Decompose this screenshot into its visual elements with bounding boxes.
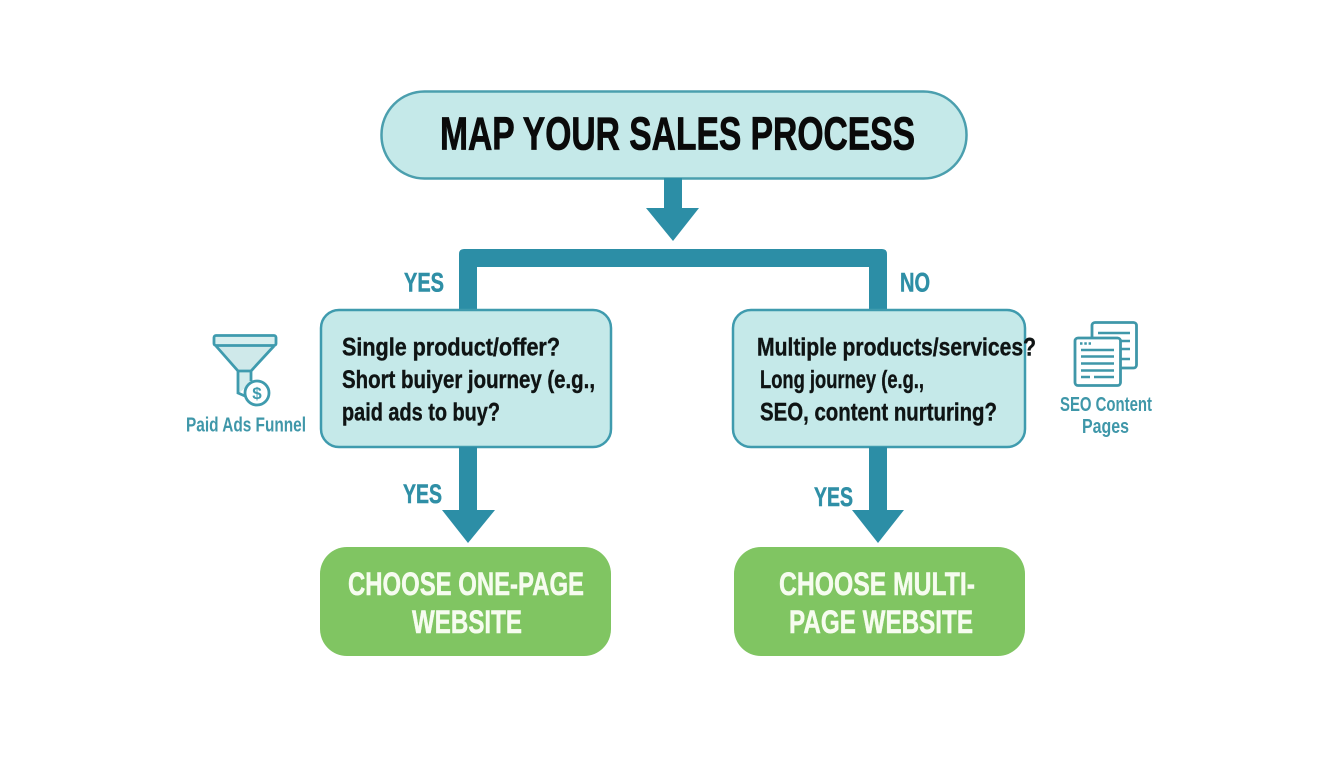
result: one-page website	[320, 547, 611, 656]
panel: multiple products question: Multiple products/services?	[757, 334, 1036, 362]
branch connector	[459, 249, 887, 311]
result: multi-page website: CHOOSE MULTI-	[779, 566, 975, 602]
arrow: title to branch	[646, 178, 699, 241]
panel: multiple products question: SEO, content nurturing?	[760, 398, 997, 426]
label: YES left: YES	[404, 268, 444, 298]
panel: multiple products question: Long journey (e.g.,	[760, 366, 924, 394]
icon label: SEO content pages: Pages	[1082, 416, 1129, 438]
result: one-page website: WEBSITE	[412, 604, 522, 640]
panel: multiple products question	[733, 310, 1036, 447]
result: multi-page website: PAGE WEBSITE	[789, 604, 973, 640]
label: YES lower left: YES	[403, 479, 442, 509]
arrow: left question to result	[442, 447, 495, 543]
title box: MAP YOUR SALES PROCESS	[440, 108, 915, 160]
panel: single product question: Single product/offer?	[342, 334, 560, 362]
icon label: SEO content pages: SEO Content	[1060, 394, 1152, 416]
panel: single product question	[321, 310, 611, 447]
title box	[382, 92, 966, 178]
label: NO: NO	[900, 268, 930, 298]
icon label: SEO content pages	[1060, 394, 1152, 438]
icon: funnel with dollar: $	[252, 384, 262, 403]
icon label: paid ads funnel: Paid Ads Funnel	[186, 414, 306, 436]
panel: single product question: Short buiyer journey (e.g.,	[342, 366, 595, 394]
panel: single product question: paid ads to buy?	[342, 398, 500, 426]
result: multi-page website	[734, 547, 1025, 656]
icon: funnel with dollar	[214, 336, 276, 405]
result: one-page website: CHOOSE ONE-PAGE	[348, 566, 584, 602]
label: YES lower right: YES	[814, 482, 853, 512]
icon: content pages	[1075, 322, 1136, 386]
arrow: right question to result	[852, 447, 904, 543]
